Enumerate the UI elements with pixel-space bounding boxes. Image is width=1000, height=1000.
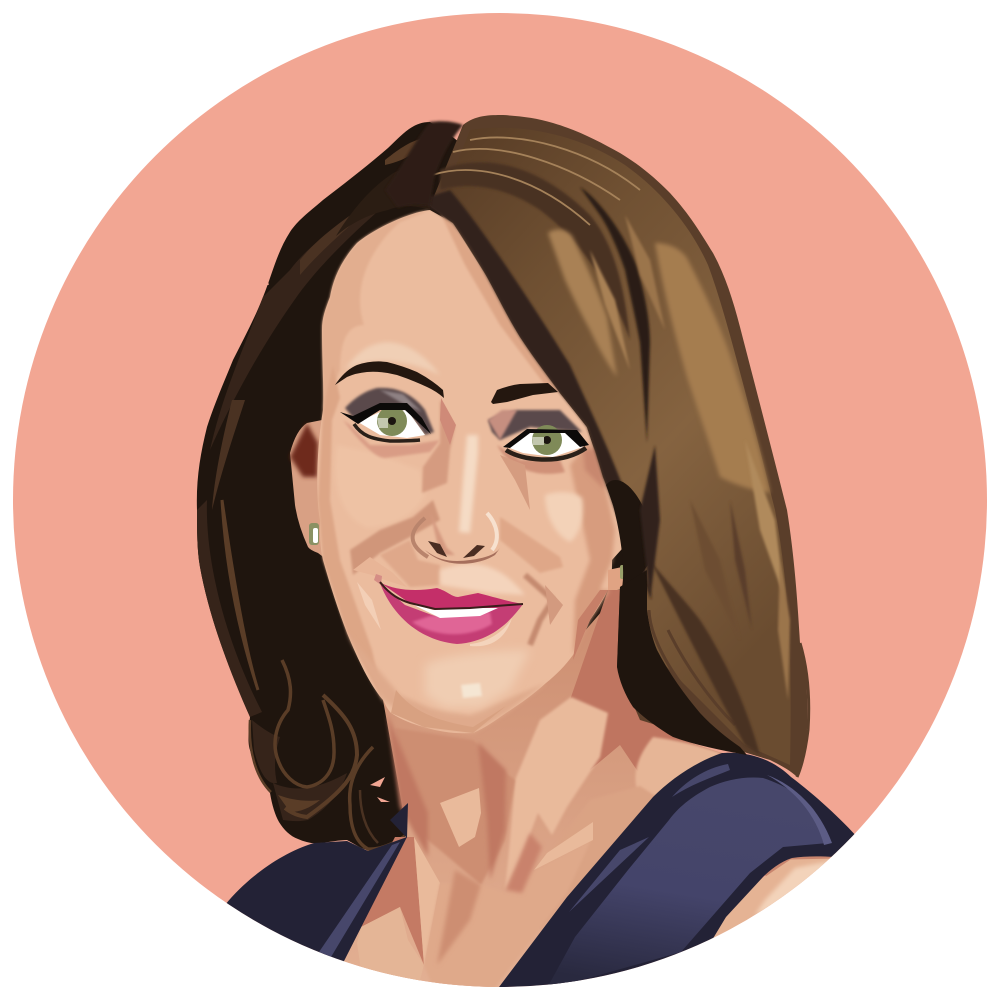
face: right side shadow [570, 440, 615, 655]
hair: lower brown strands [649, 610, 735, 725]
face: brow highlight [345, 342, 440, 375]
left eyebrow [335, 361, 444, 398]
face: right cheek highlight [545, 492, 583, 542]
neck and chest skin [342, 590, 722, 990]
hair: highlights [548, 230, 617, 377]
face: nose bridge shadow [422, 400, 455, 493]
dress: right side [493, 753, 860, 995]
nose [413, 435, 500, 564]
face: lip upper highlight [440, 564, 525, 595]
dress: strap highlights [569, 764, 730, 912]
right eye [488, 410, 589, 460]
hair: top strand lines [432, 137, 640, 225]
face: eye outer cheek shadow [583, 448, 605, 490]
face: chin shading [347, 633, 546, 733]
hair: dark lower region [617, 570, 747, 755]
dress: lit panel [546, 777, 828, 990]
arm skin [708, 852, 836, 940]
hair: outer stray strand [797, 643, 809, 777]
chest: centre [424, 964, 498, 987]
face: left edge band [322, 210, 430, 410]
dress: left strap highlight [319, 842, 400, 957]
face: under-eye shadows [343, 420, 440, 458]
chest: bottom-left light [358, 907, 420, 980]
neck: diamond highlight [440, 788, 481, 847]
right ear and earring [608, 565, 637, 590]
neck: central light panel [505, 697, 608, 890]
face: base skin [317, 210, 630, 733]
hair: crown at parting [385, 121, 463, 208]
left earring [309, 523, 319, 545]
face: chin highlight [461, 683, 482, 698]
dress [225, 753, 860, 995]
chest: light spike [414, 837, 440, 965]
hair: lower curls [252, 720, 347, 821]
face: left cheek highlight [335, 445, 425, 528]
right eyebrow [491, 383, 558, 404]
hair: dark band near face [425, 190, 652, 600]
hair: dark top band [440, 162, 630, 340]
lips [374, 574, 523, 646]
left eye [340, 388, 434, 441]
hair: outer shape [430, 115, 807, 777]
face: right fold [500, 517, 563, 573]
figure [197, 115, 880, 995]
hair: front right section [425, 115, 809, 777]
face [317, 210, 630, 733]
face: cheek fold [350, 500, 440, 575]
face: hair shadow edge [440, 212, 560, 393]
face: cheek line left [357, 582, 381, 630]
chest: light strip [534, 822, 593, 870]
neck: mid shadow [395, 728, 515, 885]
neck: right chest highlight [635, 737, 722, 797]
hair: dark seam [580, 187, 650, 443]
dress: left side [225, 837, 407, 965]
ear [290, 420, 322, 556]
chest: centre shadow spike [506, 833, 542, 893]
hair: back layer [197, 122, 660, 850]
hair: left streaks [197, 500, 262, 717]
chest: left shadow [362, 837, 424, 964]
